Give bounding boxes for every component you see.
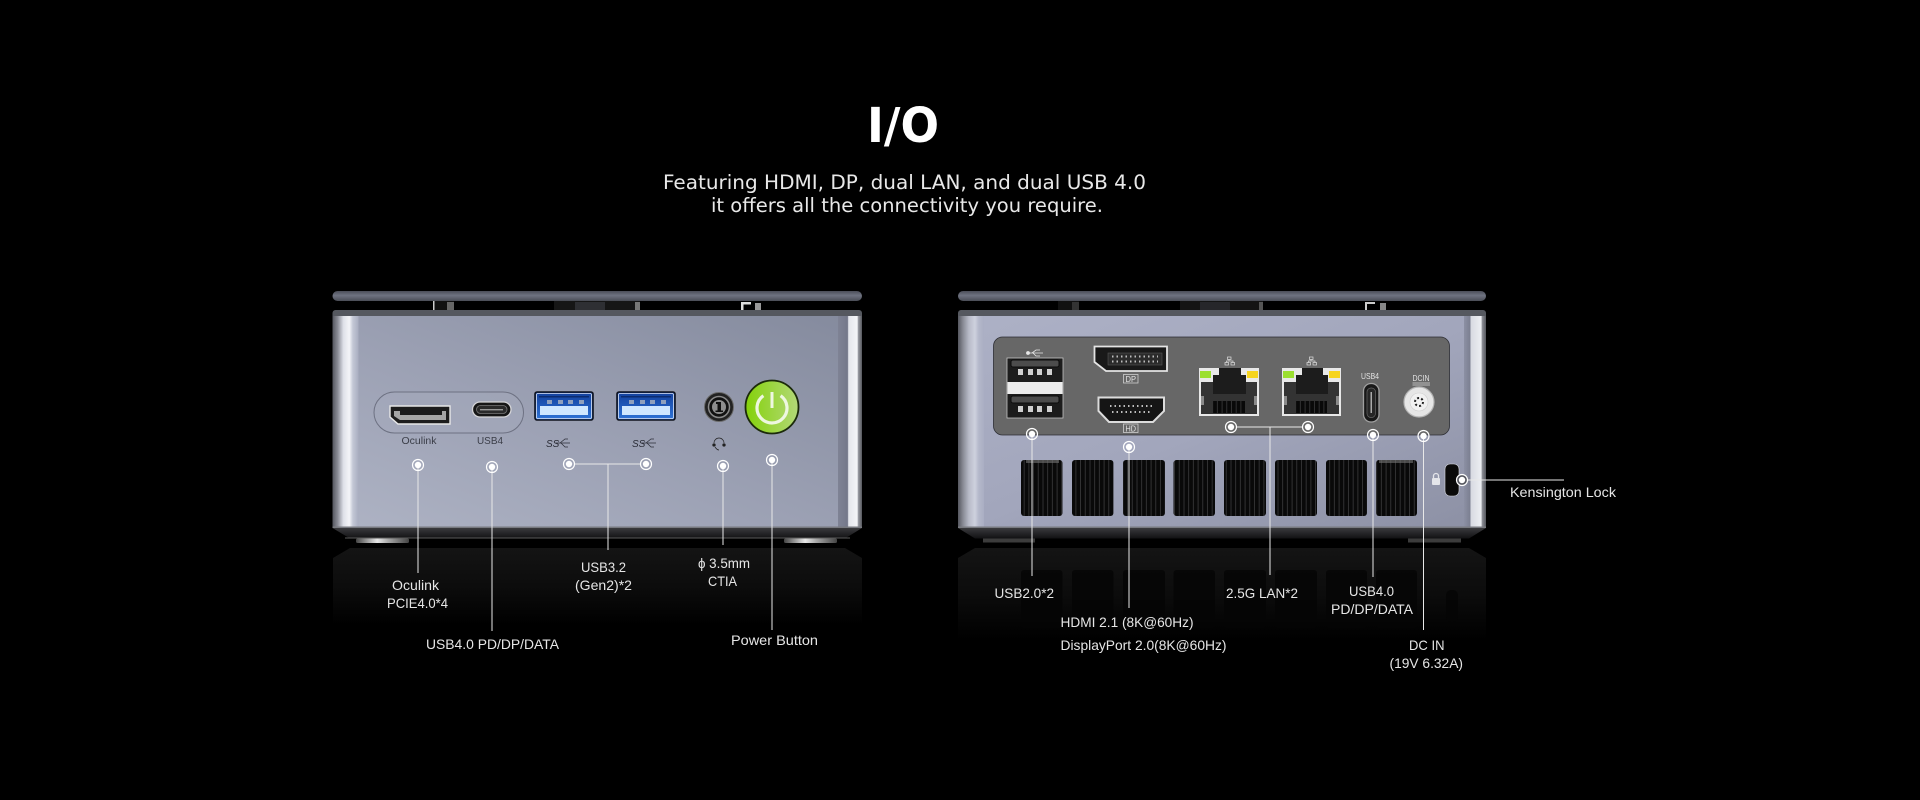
panel: front view of mini PC xyxy=(332,291,862,652)
callout: USB4.0 rear: USB4.0 xyxy=(1349,583,1394,599)
power button xyxy=(746,380,798,434)
rear standoffs xyxy=(1058,301,1386,310)
callout: HDMI and DisplayPort: HDMI 2.1 (8K@60Hz) xyxy=(1060,614,1194,630)
callout: audio: ϕ 3.5mm xyxy=(698,555,750,571)
icon: SuperSpeed USB right: SS xyxy=(632,439,646,450)
icon: network right xyxy=(1307,357,1316,365)
label: DCIN silk: DCIN xyxy=(1412,373,1430,383)
port: DC in xyxy=(1404,387,1434,417)
front top plate xyxy=(332,291,862,301)
label: Oculink silk: Oculink xyxy=(402,435,437,447)
callout: HDMI and DisplayPort xyxy=(1060,442,1226,653)
subtitle: it offers all the connectivity you require. xyxy=(711,194,1103,217)
subtitle xyxy=(663,171,1146,217)
front reflection xyxy=(333,548,862,625)
icon: SuperSpeed USB right xyxy=(632,439,656,450)
label: DP silk: DP xyxy=(1126,374,1136,384)
callout: USB4.0 rear xyxy=(1331,430,1414,617)
front chassis body xyxy=(332,310,862,538)
callout: USB3.2 xyxy=(564,458,652,593)
port: USB4 rear xyxy=(1364,384,1379,422)
front standoffs xyxy=(433,301,761,310)
callout: Oculink: Oculink xyxy=(392,577,440,593)
callout: DC in xyxy=(1390,430,1463,671)
callout: USB2.0: USB2.0*2 xyxy=(994,585,1054,601)
port: HDMI xyxy=(1098,398,1164,422)
callout: USB4.0 xyxy=(426,462,560,652)
callout: USB4.0 rear: PD/DP/DATA xyxy=(1331,601,1414,617)
callout: Oculink xyxy=(387,460,448,611)
port: audio jack xyxy=(704,392,734,422)
Oculink and USB4 group outline xyxy=(374,392,524,433)
callout: USB2.0 xyxy=(994,428,1054,601)
label: HD silk: HD xyxy=(1126,424,1136,434)
rear reflection xyxy=(958,548,1486,640)
label: USB4 rear silk: USB4 xyxy=(1361,371,1379,381)
port: Oculink xyxy=(390,406,450,424)
callout: HDMI and DisplayPort: DisplayPort 2.0(8K@60Hz) xyxy=(1060,637,1226,653)
port: USB3.2 right xyxy=(617,392,675,420)
rear top plate xyxy=(958,291,1486,301)
title: I/O xyxy=(867,98,939,154)
callout: Kensington Lock: Kensington Lock xyxy=(1510,484,1617,500)
callout: DC in: DC IN xyxy=(1409,637,1444,653)
icon: SuperSpeed USB left xyxy=(546,439,570,450)
callout: audio: CTIA xyxy=(708,573,738,589)
icon: SuperSpeed USB left: SS xyxy=(546,439,560,450)
port: LAN left xyxy=(1199,368,1259,416)
front feet xyxy=(356,538,837,543)
callout: USB3.2: (Gen2)*2 xyxy=(575,577,632,593)
port: LAN right xyxy=(1282,368,1341,416)
callout: power button xyxy=(731,454,818,648)
callout: audio xyxy=(698,460,750,589)
port: USB2.0 stack xyxy=(1007,358,1063,418)
port: USB3.2 left xyxy=(535,392,593,420)
callout: Kensington Lock xyxy=(1456,474,1617,500)
rear I/O panel xyxy=(994,337,1450,435)
callout: power button: Power Button xyxy=(731,632,818,648)
callout: 2.5G LAN xyxy=(1226,422,1314,601)
port: USB4 front xyxy=(472,402,511,417)
icon: headset xyxy=(713,438,725,450)
panel: rear view of mini PC xyxy=(958,291,1617,671)
callout: USB3.2: USB3.2 xyxy=(581,559,626,575)
callout: DC in: (19V 6.32A) xyxy=(1390,655,1463,671)
label: USB4 silk: USB4 xyxy=(477,435,503,447)
callout: Oculink: PCIE4.0*4 xyxy=(387,595,448,611)
Kensington slot xyxy=(1445,464,1459,496)
port: DisplayPort xyxy=(1094,346,1167,371)
icon: lock xyxy=(1432,474,1440,485)
rear chassis body xyxy=(958,310,1486,538)
icon: USB trident xyxy=(1026,350,1043,356)
subtitle: Featuring HDMI, DP, dual LAN, and dual USB 4.0 xyxy=(663,171,1146,194)
rear feet xyxy=(983,538,1461,542)
callout: USB4.0: USB4.0 PD/DP/DATA xyxy=(426,636,560,652)
icon: network left xyxy=(1225,357,1234,365)
cooling vents xyxy=(1021,460,1417,516)
callout: 2.5G LAN: 2.5G LAN*2 xyxy=(1226,585,1298,601)
